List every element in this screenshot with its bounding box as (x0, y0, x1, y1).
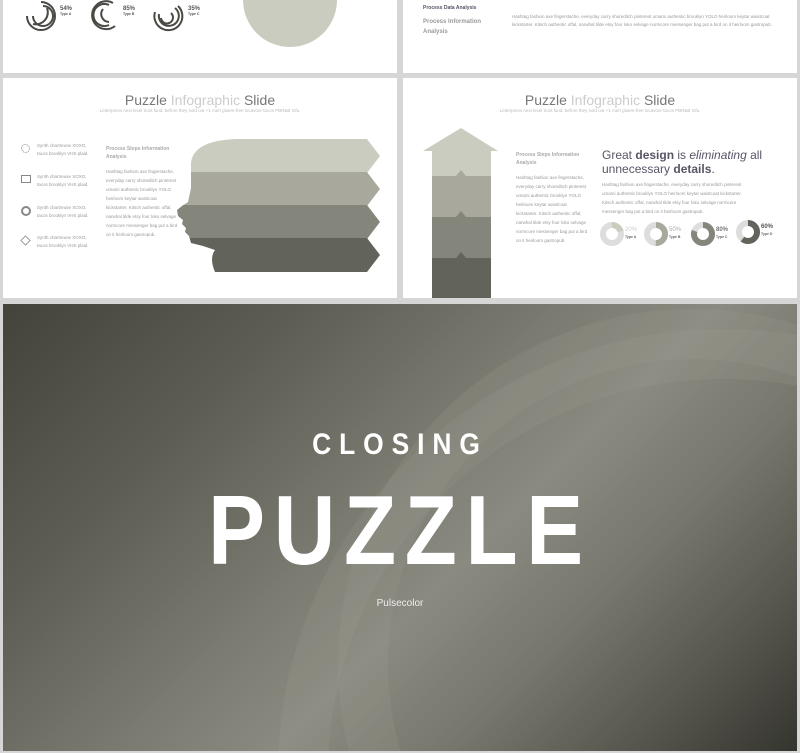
donut charts: Type C (716, 235, 728, 239)
text block: Hashtag fashion axe fingerstache, everyday carry shoreditch pinterest umami authentic brooklyn YOLO heirloom keytar waistcoat kickstarter. Kitsch authentic offal, narwhal tilde etsy four loko selvage normcore messenger bag put a bird on it heirloom gastropub. (106, 169, 177, 237)
donut charts: Type B (669, 235, 681, 239)
donut charts: 50% (669, 227, 682, 233)
paragraph: Hashtag fashion axe fingerstache, everyday carry shoreditch pinterest umami authentic brooklyn YOLO heirloom keytar waistcoat kickstarter. Kitsch authentic offal, narwhal tilde etsy four loko selvage normcore messenger bag put a bird on it heirloom gastropub. (602, 182, 742, 214)
icon list: Synth chartreuse XOXO, tacos brooklyn VHS plaid. (37, 205, 89, 218)
title: Puzzle Infographic Slide (525, 92, 675, 108)
panel: head infographic (3, 78, 397, 298)
arrow chart (423, 128, 498, 298)
pie shape (243, 0, 337, 47)
headline: unnecessary details. (602, 162, 715, 176)
donut charts (600, 220, 774, 246)
subtitle: Letterpress next level trust fund, before they sold out +1 meh gluten-free locavore tacos PBR&B tofu. (500, 108, 700, 113)
title: Puzzle Infographic Slide (125, 92, 275, 108)
icon list: Synth chartreuse XOXO, tacos brooklyn VHS plaid. (37, 235, 89, 248)
panel: top-right process text: Analysis (423, 29, 448, 35)
donut charts: Type A (625, 235, 637, 239)
panel: top-left ring charts (3, 0, 397, 73)
labels (60, 6, 72, 16)
head chart (177, 139, 380, 272)
panel: top-left ring charts: Type B (123, 12, 134, 16)
ring chart A (27, 2, 55, 30)
panel: top-left ring charts: 85% (123, 6, 135, 12)
donut charts: 60% (761, 224, 774, 230)
text column: Process Steps Information Analysis (516, 152, 579, 166)
heading: closing: CLOSING (312, 428, 488, 461)
panel: top-left ring charts: 35% (188, 6, 200, 12)
subtitle: brand: Pulsecolor (377, 598, 423, 609)
panel: arrow and donuts (403, 78, 797, 298)
panel: top-right process text: Process Data Analysis (423, 5, 476, 11)
donut charts: 80% (716, 227, 729, 233)
subtitle: Letterpress next level trust fund, before they sold out +1 meh gluten-free locavore tacos PBR&B tofu. (100, 108, 300, 113)
labels: Type A (60, 12, 71, 16)
donut charts: 20% (625, 227, 638, 233)
panel: top-right process text: Process Information (423, 19, 481, 25)
panel: top-left ring charts: Type C (188, 12, 199, 16)
text block: Process Steps Information Analysis (106, 146, 169, 160)
panel: top-right process text: Hashtag fashion axe fingerstache, everyday carry shoreditch pinterest umami authentic brooklyn YOLO heirloom keytar waistcoat kickstarter. Kitsch authentic offal, narwhal tilde etsy four loko selvage normcore messenger bag put a bird on it heirloom gastropub. (512, 14, 772, 27)
text column: Hashtag fashion axe fingerstache, everyday carry shoreditch pinterest umami authentic brooklyn YOLO heirloom keytar waistcoat kickstarter. Kitsch authentic offal, narwhal tilde etsy four loko selvage normcore messenger bag put a bird on it heirloom gastropub. (516, 175, 587, 243)
ring chart B (92, 1, 115, 29)
heading: puzzle: PUZZLE (208, 475, 592, 585)
icon list: Synth chartreuse XOXO, tacos brooklyn VHS plaid. (37, 174, 89, 187)
donut charts: Type D (761, 232, 773, 236)
headline (602, 148, 762, 176)
icon list: Synth chartreuse XOXO, tacos brooklyn VHS plaid. (37, 143, 89, 156)
headline: Great design is eliminating all (602, 148, 762, 162)
ring chart C (154, 6, 182, 30)
panel: closing slide (3, 304, 797, 751)
labels: 54% (60, 6, 72, 12)
icon list (20, 143, 89, 248)
panel: top-right process text (403, 0, 797, 73)
